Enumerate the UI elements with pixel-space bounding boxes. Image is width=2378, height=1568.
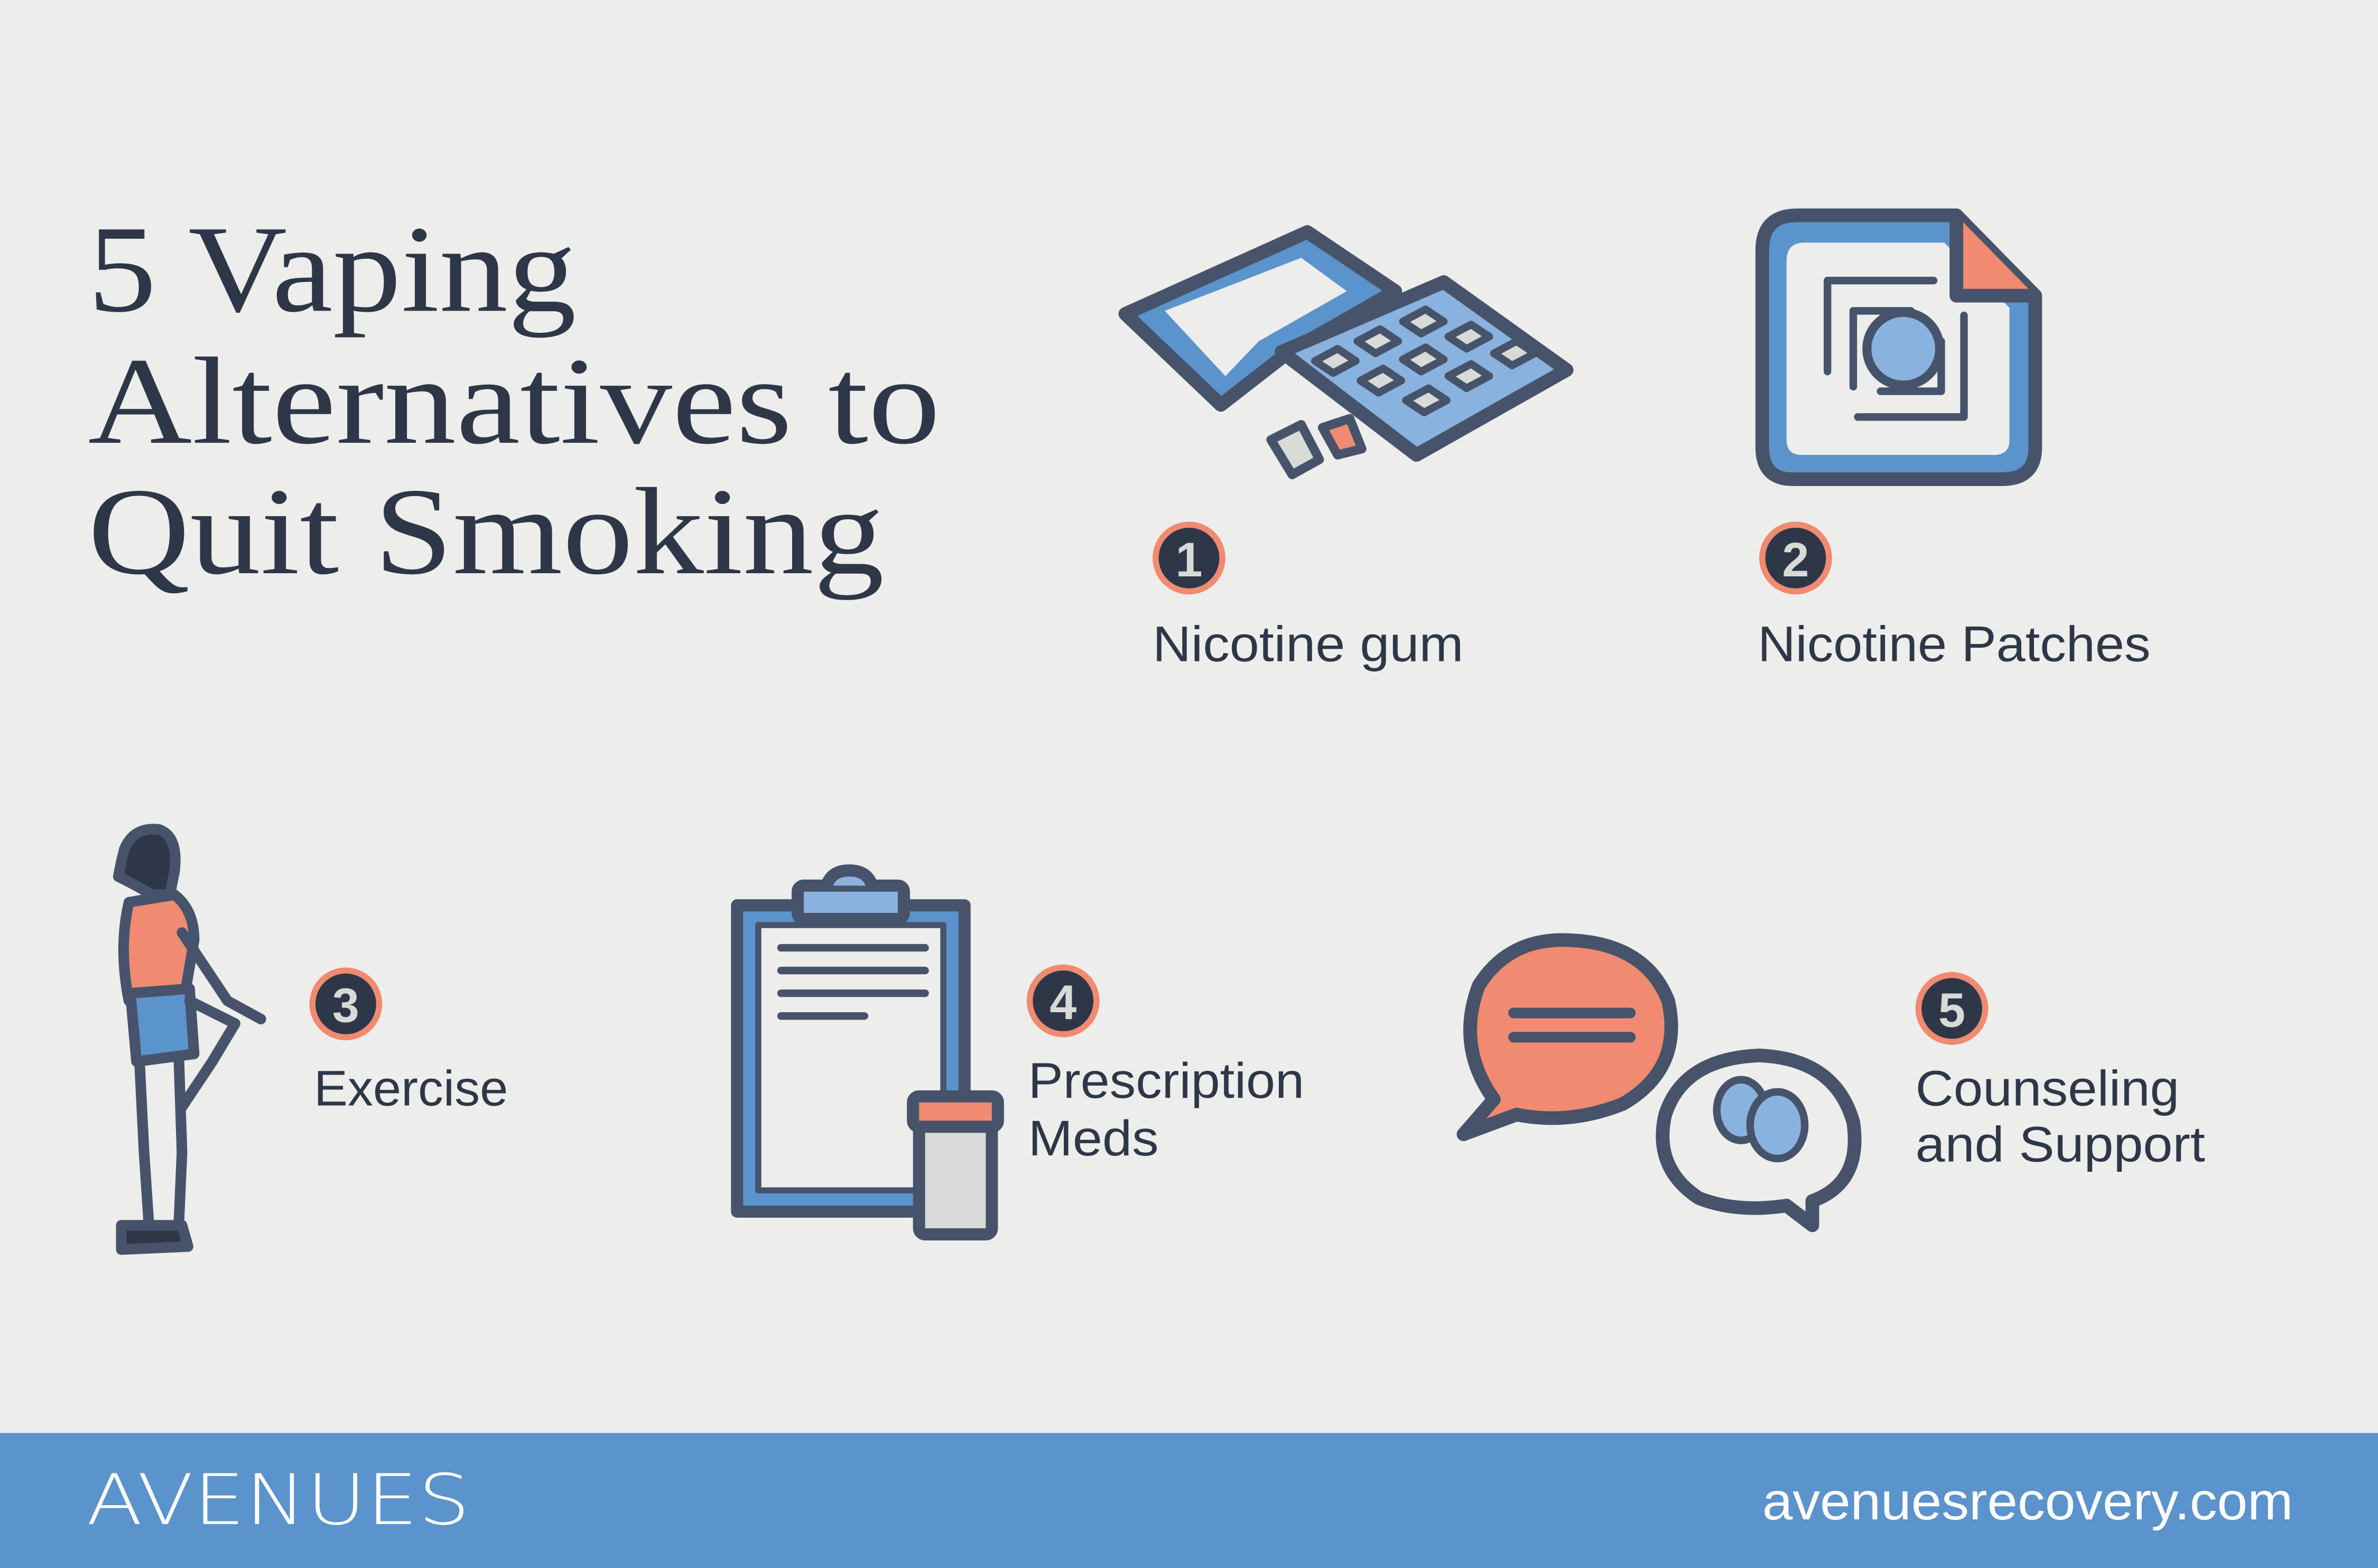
label: prescription meds: Meds <box>1028 1110 1159 1166</box>
website url: avenuesrecovery.com <box>1762 1472 2293 1531</box>
title: Alternatives to <box>88 332 940 470</box>
number 3: 3 <box>332 979 359 1033</box>
label: counseling and support: Counseling <box>1916 1061 2179 1117</box>
title: 5 Vaping <box>88 200 577 338</box>
number 2: 2 <box>1782 533 1809 587</box>
icon: nicotine gum <box>1125 232 1567 474</box>
footer bar <box>0 1433 2378 1568</box>
icon: clipboard with pill bottle <box>737 871 998 1235</box>
label: prescription meds: Prescription <box>1028 1053 1304 1109</box>
label: counseling and support: and Support <box>1916 1117 2205 1173</box>
logo: avenues: AVENUES <box>87 1460 470 1541</box>
icon: speech bubbles <box>1463 940 1855 1225</box>
title: Quit Smoking <box>88 462 884 600</box>
number 5: 5 <box>1938 983 1965 1037</box>
number 2 <box>1762 525 1829 591</box>
number 3 <box>312 970 379 1037</box>
number 5 <box>1918 975 1985 1042</box>
label: nicotine gum: Nicotine gum <box>1153 616 1463 672</box>
number 1 <box>1156 525 1222 591</box>
number 1: 1 <box>1175 533 1203 587</box>
title <box>88 200 940 600</box>
label: nicotine patches: Nicotine Patches <box>1758 616 2151 672</box>
label: counseling and support <box>1916 1061 2205 1173</box>
label: exercise: Exercise <box>314 1061 508 1117</box>
icon: nicotine patch <box>1762 216 2035 479</box>
icon: exercise person <box>118 829 261 1249</box>
number 4 <box>1030 967 1097 1034</box>
number 4: 4 <box>1049 976 1076 1030</box>
label: prescription meds <box>1028 1053 1304 1166</box>
